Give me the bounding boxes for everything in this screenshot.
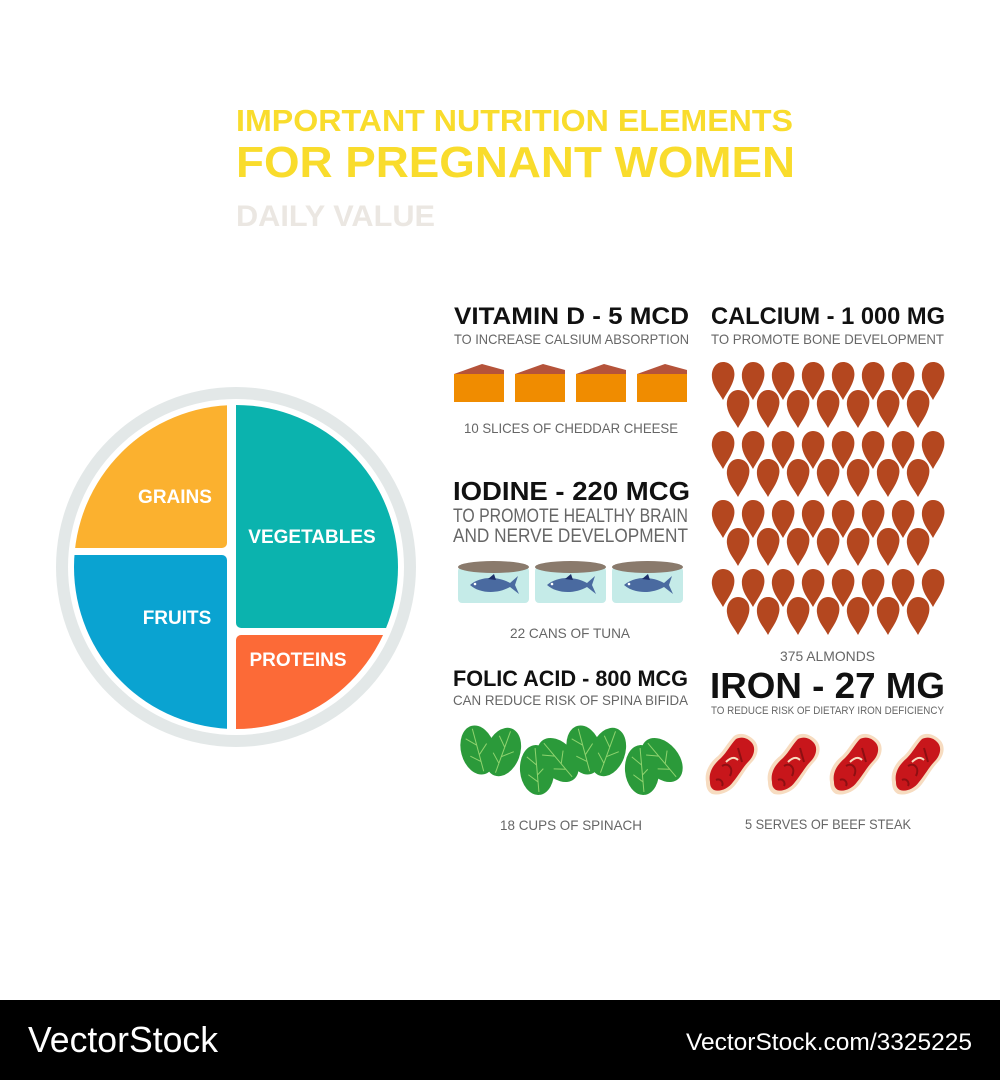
panel: folic acid — [453, 666, 691, 833]
almonds grid — [712, 362, 944, 635]
plate chart — [56, 387, 416, 747]
panel: iodine — [453, 476, 690, 641]
title — [236, 103, 795, 233]
panel: calcium: 375 ALMONDS — [780, 648, 875, 664]
footer — [0, 1000, 1000, 1080]
panel: iron: 5 SERVES OF BEEF STEAK — [745, 816, 912, 832]
footer: VectorStock — [28, 1019, 219, 1060]
panel: vitamin D: 10 SLICES OF CHEDDAR CHEESE — [464, 420, 678, 436]
panel: iron — [706, 665, 945, 832]
panel: calcium: CALCIUM - 1 000 MG — [711, 303, 945, 330]
plate chart: GRAINS — [138, 487, 212, 508]
segment: grains — [75, 405, 227, 548]
panel: iodine: TO PROMOTE HEALTHY BRAIN — [453, 506, 688, 527]
segment: proteins — [236, 635, 383, 729]
panel: iodine: IODINE - 220 MCG — [453, 476, 690, 506]
panel: folic acid: FOLIC ACID - 800 MCG — [453, 666, 688, 691]
panel: folic acid: CAN REDUCE RISK OF SPINA BIFIDA — [453, 692, 689, 708]
panel: vitamin D: TO INCREASE CALSIUM ABSORPTION — [454, 331, 689, 347]
title: FOR PREGNANT WOMEN — [236, 138, 795, 187]
segment: vegetables — [236, 400, 406, 628]
title: DAILY VALUE — [236, 200, 435, 233]
panel: iodine: 22 CANS OF TUNA — [510, 625, 631, 641]
footer: VectorStock.com/3325225 — [686, 1029, 972, 1056]
panel: iron: TO REDUCE RISK OF DIETARY IRON DEFICIENCY — [711, 705, 945, 717]
panel: vitamin D — [454, 303, 689, 436]
title: IMPORTANT NUTRITION ELEMENTS — [236, 103, 793, 138]
panel: calcium: TO PROMOTE BONE DEVELOPMENT — [711, 331, 944, 347]
plate chart: FRUITS — [143, 608, 211, 629]
segment: fruits — [74, 555, 227, 729]
panel: iron: IRON - 27 MG — [710, 665, 945, 706]
panel: iodine: AND NERVE DEVELOPMENT — [453, 526, 688, 547]
plate chart: PROTEINS — [249, 650, 347, 671]
panel: vitamin D: VITAMIN D - 5 MCD — [454, 303, 689, 330]
plate chart: VEGETABLES — [248, 527, 376, 548]
panel: folic acid: 18 CUPS OF SPINACH — [500, 817, 642, 833]
panel: calcium — [711, 303, 945, 664]
